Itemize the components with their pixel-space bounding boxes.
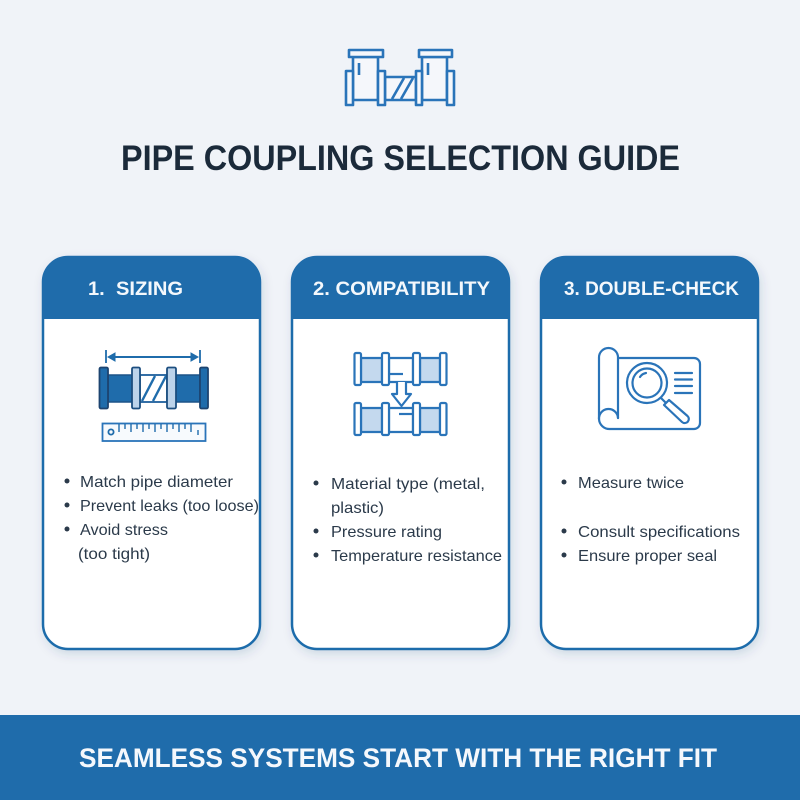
- bullet list: compatibility: Temperature resistance: [331, 548, 502, 565]
- bullet list: compatibility: Material type (metal,: [331, 476, 485, 493]
- header: sizing: 1. SIZING: [88, 278, 183, 300]
- header: compatibility: 2. COMPATIBILITY: [313, 278, 490, 300]
- header: sizing: [42, 256, 261, 319]
- bullet list: double-check: Ensure proper seal: [578, 548, 717, 565]
- bullet list: compatibility: [314, 476, 502, 565]
- header: double-check: [540, 256, 759, 319]
- panel: sizing: [42, 256, 261, 649]
- panel: compatibility: [291, 256, 510, 649]
- title: PIPE COUPLING SELECTION GUIDE: [121, 139, 680, 178]
- bullet list: compatibility: plastic): [331, 500, 384, 517]
- bullet list: sizing: Prevent leaks (too loose): [80, 498, 259, 515]
- icon: blueprint and magnifier: [599, 348, 700, 429]
- bullet list: sizing: Avoid stress: [80, 522, 168, 539]
- bullet list: double-check: Measure twice: [578, 475, 684, 492]
- bullet list: sizing: (too tight): [78, 546, 150, 563]
- panel: double-check: [540, 256, 759, 649]
- footer banner: [0, 715, 800, 800]
- bullet list: compatibility: Pressure rating: [331, 524, 442, 541]
- bullet list: sizing: [64, 474, 259, 563]
- icon: coupling with dimension arrow and ruler: [100, 350, 208, 441]
- bullet list: double-check: [562, 475, 740, 565]
- icon: pipe coupling: [346, 50, 454, 105]
- header: double-check: 3. DOUBLE-CHECK: [564, 278, 739, 300]
- footer banner: SEAMLESS SYSTEMS START WITH THE RIGHT FIT: [79, 743, 717, 773]
- header: compatibility: [291, 256, 510, 319]
- bullet list: sizing: Match pipe diameter: [80, 474, 234, 491]
- bullet list: double-check: Consult specifications: [578, 524, 740, 541]
- icon: two couplings with arrow: [354, 353, 446, 435]
